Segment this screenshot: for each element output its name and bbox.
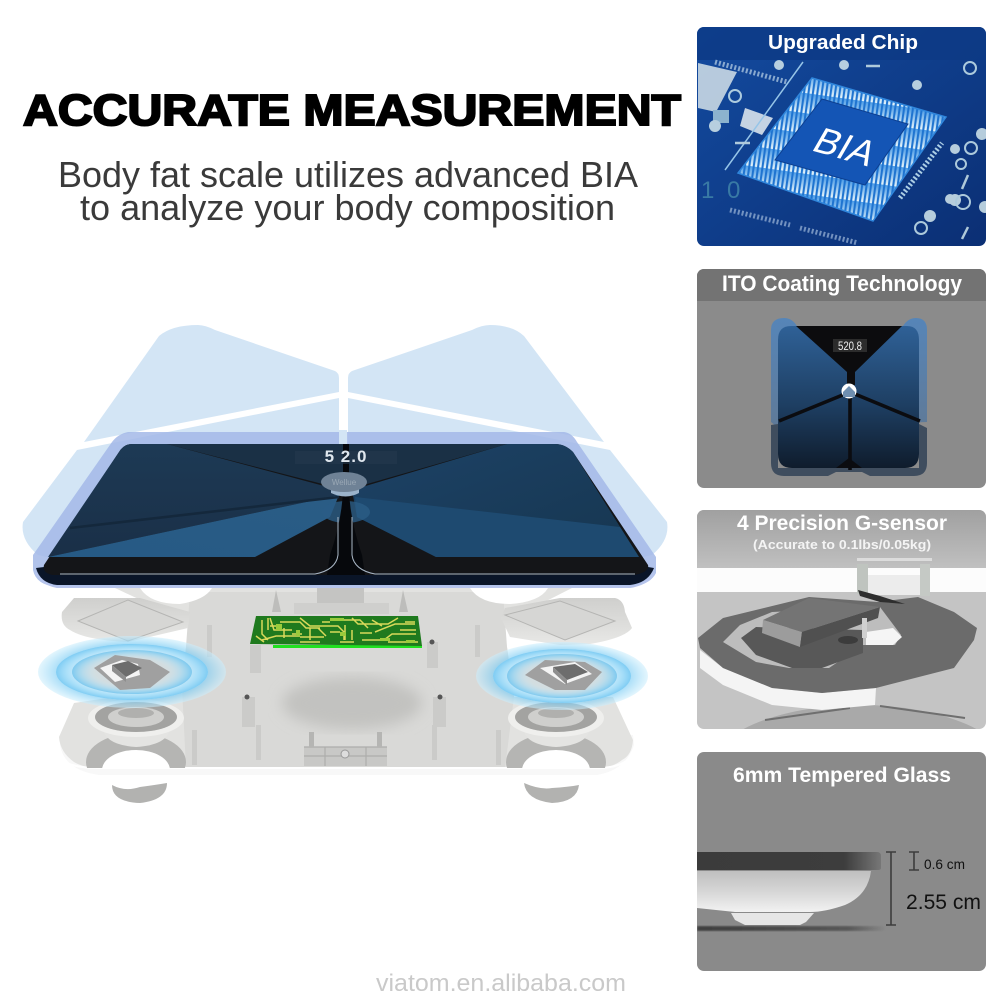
top connector: [272, 588, 408, 614]
rear cutouts: [140, 588, 548, 604]
upper left translucent electrode: [84, 325, 339, 442]
ITO heading: ITO Coating Technology: [722, 271, 963, 296]
sensor metal ring: [698, 597, 977, 693]
title: ACCURATE MEASUREMENT: [23, 86, 681, 135]
label 0.6 cm: 0.6 cm: [924, 856, 965, 872]
subtitle: to analyze your body composition: [80, 187, 615, 228]
sensor paddle: [741, 627, 863, 668]
standoff posts: [192, 625, 501, 765]
weight display: 5 2.0: [325, 447, 367, 466]
logo button: [321, 472, 367, 496]
speaker cup right: [506, 702, 606, 768]
right upper panel: [352, 444, 639, 557]
sensor ripple left: [38, 636, 226, 708]
right highlight strip: [355, 497, 639, 557]
chip heading: Upgraded Chip: [768, 32, 918, 54]
mini display: 520.8: [838, 339, 862, 353]
logo button: Wellue: [332, 478, 357, 487]
electrode outlines: [60, 517, 635, 574]
upper right translucent electrode: [348, 325, 604, 442]
thickness bracket 0.6 cm: [909, 852, 919, 870]
exploded scale illustration: [23, 325, 667, 803]
rubber foot left: [112, 783, 167, 803]
panel: tempered glass: [697, 752, 986, 971]
left side flap: [62, 598, 190, 642]
G-sensor heading: (Accurate to 0.1lbs/0.05kg): [753, 537, 931, 552]
sensor screw: [838, 636, 858, 644]
G-sensor heading: [737, 512, 947, 552]
mini center button: [842, 384, 856, 398]
glass top sheet: [33, 430, 656, 587]
scale glass surface: [44, 444, 648, 575]
watermark: viatom.en.alibaba.com: [376, 970, 626, 997]
side profile of scale: [697, 852, 885, 931]
load cell block side: [800, 607, 880, 647]
subtitle: [58, 154, 638, 228]
G-sensor heading: 4 Precision G-sensor: [737, 512, 947, 535]
sensor ripple right: [476, 642, 648, 710]
glass heading: 6mm Tempered Glass: [733, 764, 951, 787]
circuit board decorations: 1 0: [701, 177, 743, 204]
right side flap: [501, 598, 632, 645]
subtitle: Body fat scale utilizes advanced BIA: [58, 154, 638, 195]
left reflection line: [70, 497, 339, 528]
hinge clip: [858, 590, 905, 604]
panel: upgraded chip: [697, 27, 991, 246]
sensor pin: [862, 618, 867, 638]
BIA chip: [775, 99, 908, 185]
sensor metal left: [94, 655, 170, 690]
circuit board: [250, 616, 422, 648]
mini scale: [771, 318, 927, 476]
panel: ITO coating: [697, 269, 986, 488]
BIA chip: BIA: [806, 120, 885, 173]
processor socket: [738, 78, 946, 221]
ring opening: [723, 607, 901, 668]
load cell block top: [763, 598, 880, 632]
speaker cup left: [86, 702, 186, 768]
white edge under sensor ring: [700, 650, 876, 710]
lower right translucent electrode: [348, 398, 667, 560]
circuit board decorations: [698, 60, 991, 243]
lower display glow: [322, 501, 370, 523]
white gap by paddle: [866, 628, 902, 645]
flap panel lines: [78, 600, 615, 641]
center spine: [327, 444, 365, 575]
lower left translucent electrode: [23, 398, 339, 560]
panel: G-sensor: [697, 510, 986, 729]
thickness bracket 2.55 cm: [886, 852, 896, 925]
lower speaker rim: [744, 705, 976, 729]
rubber foot right: [524, 783, 579, 803]
label 2.55 cm: 2.55 cm: [906, 891, 981, 914]
bottom connector: [304, 732, 387, 766]
hinge bracket: [857, 558, 932, 596]
left upper panel: [48, 444, 339, 557]
base plate of the scale: [59, 588, 634, 775]
weight display: [295, 447, 397, 466]
sensor metal right: [525, 660, 602, 690]
top wedge: [167, 444, 507, 490]
load cell block front: [762, 620, 802, 647]
left lower blue panel: [48, 495, 339, 557]
